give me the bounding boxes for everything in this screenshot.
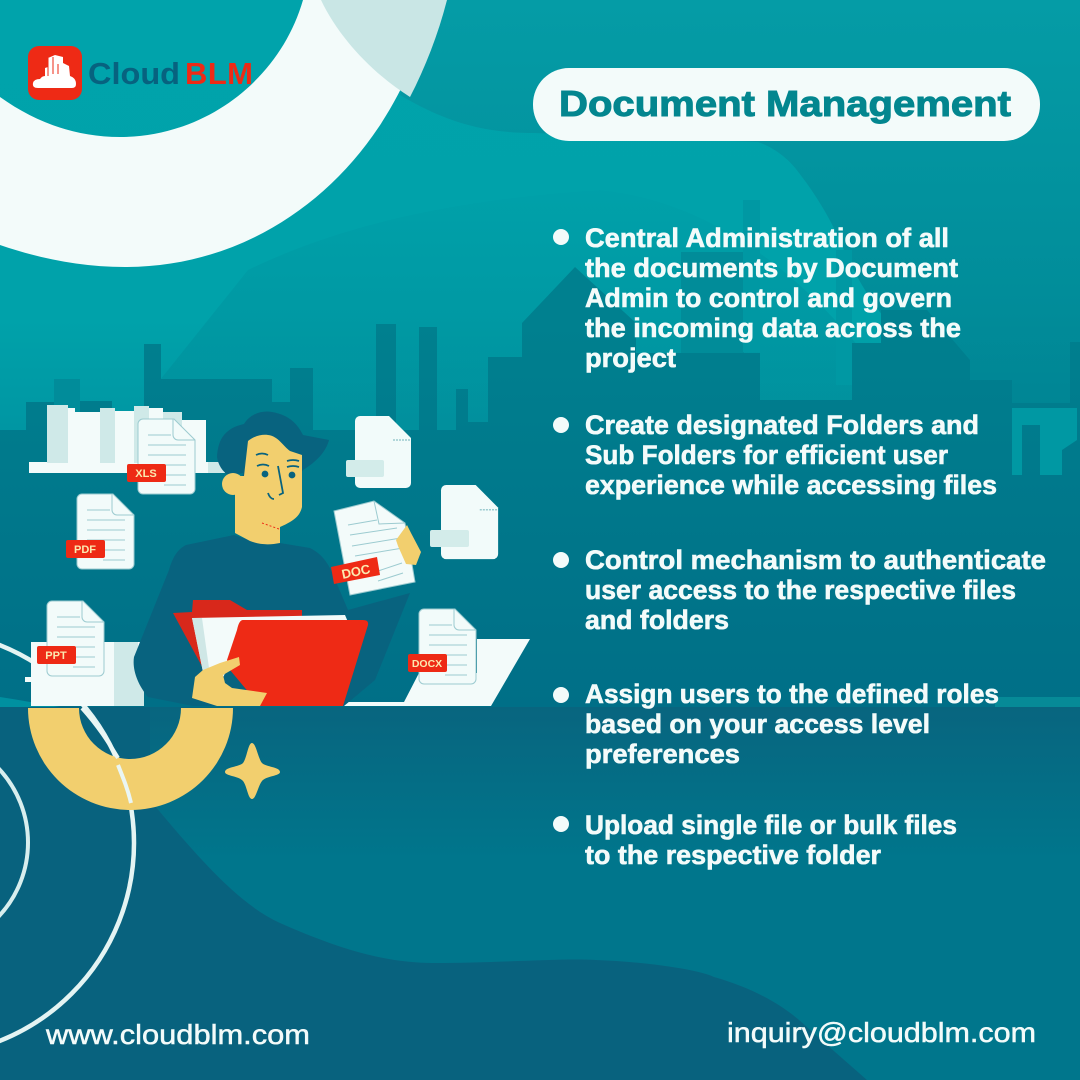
folder dotted edge <box>192 618 209 672</box>
logo icon <box>28 46 82 100</box>
bullet 4: Assign users to the defined roles <box>585 679 999 709</box>
yellow half ring <box>28 708 233 810</box>
logo <box>28 46 253 100</box>
title pill <box>533 68 1040 141</box>
lower lighter blob <box>150 707 1080 1080</box>
file: PDF <box>66 494 134 569</box>
file: DOC: DOC <box>340 561 372 582</box>
white arc over ring <box>82 708 131 803</box>
logo text blm: BLM <box>185 56 253 91</box>
bullet 2: experience while accessing files <box>585 470 997 500</box>
red tablet <box>227 620 368 706</box>
file: XLS <box>127 419 195 494</box>
ring shape <box>0 0 432 267</box>
file: DOCX <box>408 609 476 684</box>
body <box>134 535 410 706</box>
bullet 4: based on your access level <box>585 709 930 739</box>
background haze <box>144 190 900 707</box>
yellow star <box>225 743 280 799</box>
file: PPT: PPT <box>45 650 67 662</box>
bullet 2: Sub Folders for efficient user <box>585 440 948 470</box>
bullet 1: Central Administration of all <box>585 223 949 253</box>
bullet 4: preferences <box>585 739 740 769</box>
bullet 5: Upload single file or bulk files <box>585 810 957 840</box>
bullet 1 <box>553 223 961 373</box>
hand holding document <box>396 525 421 565</box>
red folder back <box>173 600 302 672</box>
bullet list <box>553 223 1046 870</box>
bullet 1: the documents by Document <box>585 253 958 283</box>
white arc small <box>0 734 28 950</box>
bullet 3 <box>553 545 1046 635</box>
ear <box>222 473 244 495</box>
logo text cloud: Cloud <box>88 56 180 91</box>
background upper <box>0 0 1080 707</box>
bullet 4 <box>553 679 999 769</box>
bookshelf <box>29 405 225 473</box>
bullet 1: project <box>585 343 676 373</box>
background dark blob top right <box>400 0 1080 410</box>
bullet 3: Control mechanism to authenticate <box>585 545 1046 575</box>
eyes and brows <box>256 454 299 499</box>
bullet 1: the incoming data across the <box>585 313 961 343</box>
bullet 5 <box>553 810 957 870</box>
blank file upper <box>346 416 411 488</box>
hand on tablet <box>192 657 267 706</box>
footer email: inquiry@cloudblm.com <box>727 1017 1036 1048</box>
bullet 1: Admin to control and govern <box>585 283 952 313</box>
file: DOC <box>331 501 415 595</box>
bullet 5: to the respective folder <box>585 840 881 870</box>
person <box>134 412 410 706</box>
ring dotted overlap <box>321 0 447 97</box>
bullet 2: Create designated Folders and <box>585 410 979 440</box>
blank file right <box>430 485 498 559</box>
file: PDF: PDF <box>74 544 96 556</box>
white folder <box>192 615 348 680</box>
bullet 3: user access to the respective files <box>585 575 1016 605</box>
illustration <box>25 405 530 706</box>
laptop <box>344 639 530 706</box>
footer website: www.cloudblm.com <box>45 1019 310 1050</box>
bullet 3: and folders <box>585 605 729 635</box>
floor left highlight <box>0 697 60 707</box>
background lower <box>0 707 1080 1080</box>
skyline buildings <box>0 200 1080 707</box>
file: DOCX: DOCX <box>412 658 442 670</box>
white arc large <box>0 630 134 1056</box>
bullet 2 <box>553 410 997 500</box>
desk box left <box>25 642 144 706</box>
face and neck <box>235 435 302 544</box>
title: Document Management <box>559 83 1011 124</box>
file: XLS: XLS <box>135 468 157 480</box>
hair <box>217 412 329 490</box>
file: PPT <box>37 601 104 676</box>
neck line <box>262 523 279 529</box>
